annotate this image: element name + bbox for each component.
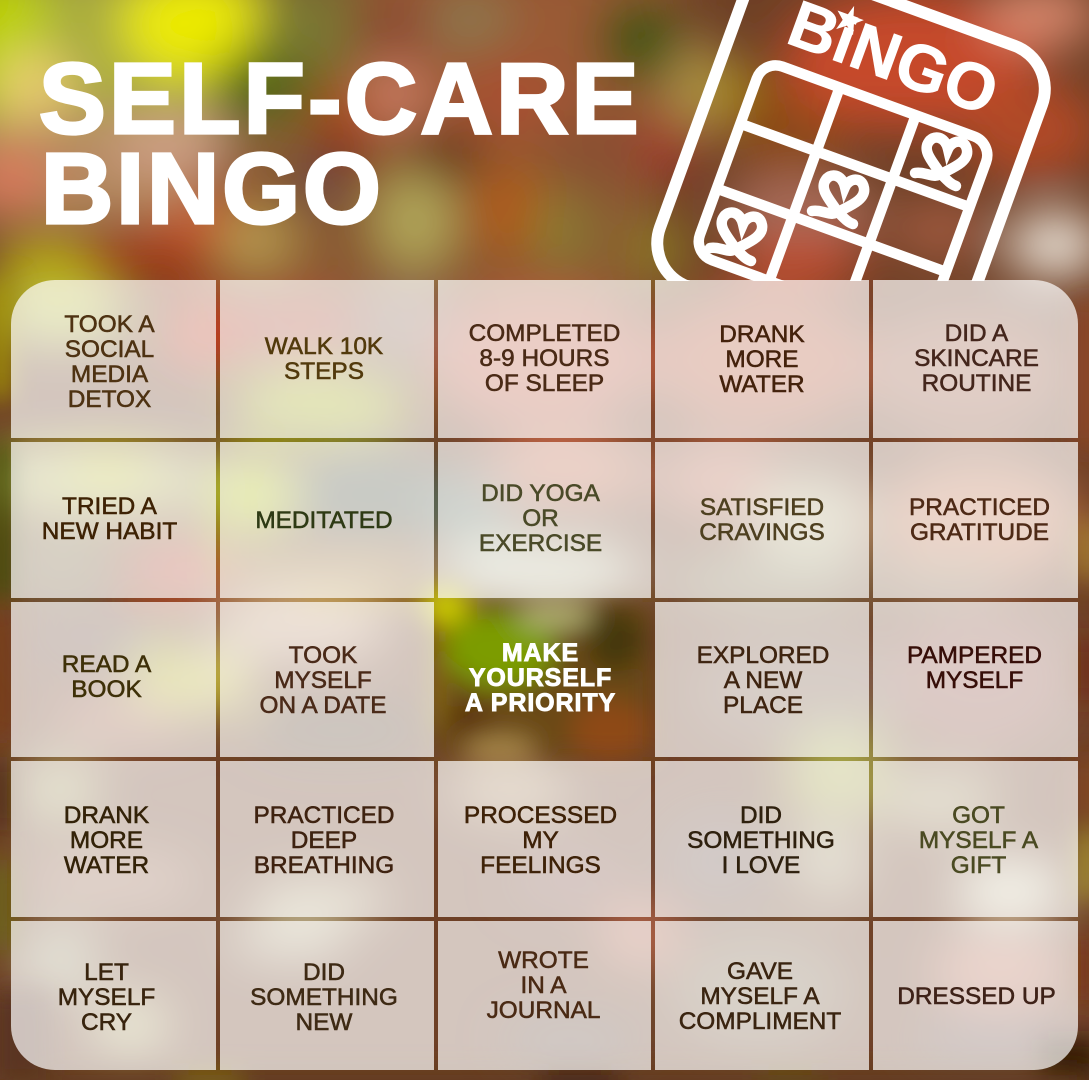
cell: processed my feelings: MY bbox=[522, 826, 559, 854]
cell: did yoga or exercise: OR bbox=[522, 504, 559, 532]
cell: did a skincare routine: SKINCARE bbox=[914, 344, 1039, 372]
cell: dressed up: DRESSED UP bbox=[897, 983, 1056, 1010]
cell: took a social media detox: DETOX bbox=[68, 386, 151, 413]
cell: did something i love: I LOVE bbox=[722, 852, 800, 878]
cell: practiced deep breathing bbox=[220, 761, 434, 917]
cell: drank more water: DRANK bbox=[64, 802, 149, 828]
title line 1: SELF-CARE bbox=[39, 43, 642, 155]
cell: did something new: NEW bbox=[296, 1009, 352, 1036]
cell: wrote in a journal: IN A bbox=[520, 972, 567, 999]
panel: bingo grid bbox=[11, 280, 1078, 1070]
cell: let myself cry: MYSELF bbox=[58, 984, 155, 1011]
top area bbox=[0, 0, 260, 130]
icon: heart ribbon 1 bbox=[915, 137, 967, 186]
cell: took a social media detox: MEDIA bbox=[71, 361, 148, 388]
cell: walk 10k steps bbox=[220, 280, 434, 438]
icon: bingo card bbox=[651, 0, 1051, 281]
icon: heart ribbon 2 bbox=[812, 175, 864, 224]
cell: took a social media detox: TOOK A bbox=[64, 311, 155, 338]
cell: completed 8-9 hours of sleep: 8-9 HOURS bbox=[479, 344, 610, 372]
cell: drank more water: DRANK bbox=[719, 320, 805, 348]
center cell colours bbox=[438, 602, 651, 757]
cell: drank more water: MORE bbox=[70, 826, 143, 854]
cell: gave myself a compliment bbox=[655, 921, 869, 1070]
cell: meditated: MEDITATED bbox=[255, 506, 393, 534]
cell: let myself cry: LET bbox=[84, 959, 129, 986]
bottom edge bbox=[0, 1072, 1089, 1080]
cell: explored a new place: PLACE bbox=[723, 692, 803, 719]
cell: explored a new place bbox=[655, 602, 869, 757]
cell: make yourself a priority bbox=[464, 639, 616, 717]
cell: took a social media detox: SOCIAL bbox=[65, 336, 154, 363]
cell: took myself on a date: TOOK bbox=[289, 642, 357, 669]
cell: completed 8-9 hours of sleep bbox=[438, 280, 651, 438]
cell: drank more water: WATER bbox=[64, 852, 149, 878]
cell: took a social media detox bbox=[11, 280, 216, 438]
cell: completed 8-9 hours of sleep: COMPLETED bbox=[469, 320, 620, 346]
title bbox=[39, 43, 642, 245]
cell: satisfied cravings: CRAVINGS bbox=[699, 519, 825, 546]
cell: read a book: BOOK bbox=[71, 676, 142, 702]
fourth row bbox=[20, 756, 100, 824]
cell: took myself on a date: MYSELF bbox=[274, 667, 372, 694]
cell: did something new bbox=[220, 921, 434, 1070]
cell: practiced deep breathing: PRACTICED bbox=[254, 802, 394, 828]
cell: walk 10k steps: STEPS bbox=[284, 358, 364, 385]
cell: got myself a gift: GIFT bbox=[951, 852, 1006, 878]
cell: dressed up bbox=[873, 921, 1078, 1070]
cell: did something i love: DID bbox=[740, 802, 782, 828]
grid line tints bbox=[14, 438, 194, 442]
cell: drank more water: WATER bbox=[719, 370, 805, 398]
cell: did yoga or exercise bbox=[438, 442, 651, 598]
cell: pampered myself: PAMPERED bbox=[907, 642, 1042, 668]
cell: make yourself a priority: A PRIORITY bbox=[465, 689, 616, 717]
card grid bbox=[693, 60, 993, 281]
cell: tried a new habit: TRIED A bbox=[62, 493, 157, 520]
cell: wrote in a journal: JOURNAL bbox=[487, 997, 600, 1024]
cell: practiced gratitude: GRATITUDE bbox=[910, 519, 1049, 546]
cell: took myself on a date: ON A DATE bbox=[260, 692, 386, 719]
icon: heart ribbon 3 bbox=[710, 212, 762, 261]
second row bbox=[0, 444, 210, 516]
cell: did a skincare routine: DID A bbox=[945, 320, 1008, 346]
cell: explored a new place: A NEW bbox=[724, 667, 802, 694]
cell: processed my feelings bbox=[438, 761, 651, 917]
cell: tried a new habit: NEW HABIT bbox=[42, 518, 177, 545]
cell: pampered myself: MYSELF bbox=[926, 666, 1023, 694]
cell: did a skincare routine: ROUTINE bbox=[922, 370, 1031, 396]
cell: did something i love: SOMETHING bbox=[687, 826, 835, 854]
cell: processed my feelings: PROCESSED bbox=[464, 802, 617, 828]
first row bbox=[0, 285, 130, 345]
cell: processed my feelings: FEELINGS bbox=[480, 852, 601, 878]
cell: practiced gratitude bbox=[873, 442, 1078, 598]
cell: did yoga or exercise: EXERCISE bbox=[479, 530, 602, 556]
cell: pampered myself bbox=[873, 602, 1078, 757]
cell: wrote in a journal bbox=[438, 921, 651, 1070]
cell: did something new: DID bbox=[303, 959, 345, 986]
cell: let myself cry bbox=[11, 921, 216, 1070]
cell: make yourself a priority: YOURSELF bbox=[469, 664, 612, 692]
cell: did yoga or exercise: DID YOGA bbox=[481, 480, 600, 506]
title line 2: BINGO bbox=[41, 133, 384, 245]
cell: drank more water bbox=[655, 280, 869, 438]
cell: did something new: SOMETHING bbox=[250, 984, 398, 1011]
cell: meditated bbox=[220, 442, 434, 598]
cell: walk 10k steps: WALK 10K bbox=[265, 333, 383, 360]
card frame bbox=[651, 0, 1051, 281]
cell: drank more water: MORE bbox=[725, 346, 799, 372]
cell: tried a new habit bbox=[11, 442, 216, 598]
cell: gave myself a compliment: GAVE bbox=[727, 958, 793, 985]
cell: got myself a gift bbox=[873, 761, 1078, 917]
third row bbox=[20, 610, 160, 670]
cell: completed 8-9 hours of sleep: OF SLEEP bbox=[485, 370, 604, 396]
cell: took myself on a date bbox=[220, 602, 434, 757]
cell: practiced deep breathing: DEEP bbox=[291, 826, 357, 854]
cell: gave myself a compliment: COMPLIMENT bbox=[679, 1008, 841, 1035]
cell: drank more water bbox=[11, 761, 216, 917]
cell: got myself a gift: GOT bbox=[952, 802, 1005, 828]
cell: gave myself a compliment: MYSELF A bbox=[700, 983, 820, 1010]
cell: wrote in a journal: WROTE bbox=[498, 947, 589, 974]
cell: got myself a gift: MYSELF A bbox=[919, 826, 1038, 854]
fifth row bbox=[20, 924, 100, 996]
icon: star bbox=[836, 6, 864, 36]
cell: let myself cry: CRY bbox=[81, 1009, 132, 1036]
cell: practiced gratitude: PRACTICED bbox=[909, 494, 1050, 521]
cell: make yourself a priority: MAKE bbox=[502, 639, 579, 667]
cell: explored a new place: EXPLORED bbox=[697, 642, 829, 669]
cell: satisfied cravings: SATISFIED bbox=[700, 494, 824, 521]
right edge bbox=[1078, 300, 1089, 450]
cell: satisfied cravings bbox=[655, 442, 869, 598]
cell: did a skincare routine bbox=[873, 280, 1078, 438]
cell: practiced deep breathing: BREATHING bbox=[254, 852, 394, 878]
cell: did something i love bbox=[655, 761, 869, 917]
cell: read a book bbox=[11, 602, 216, 757]
left edge bbox=[0, 280, 11, 400]
cell: read a book: READ A bbox=[62, 650, 151, 678]
